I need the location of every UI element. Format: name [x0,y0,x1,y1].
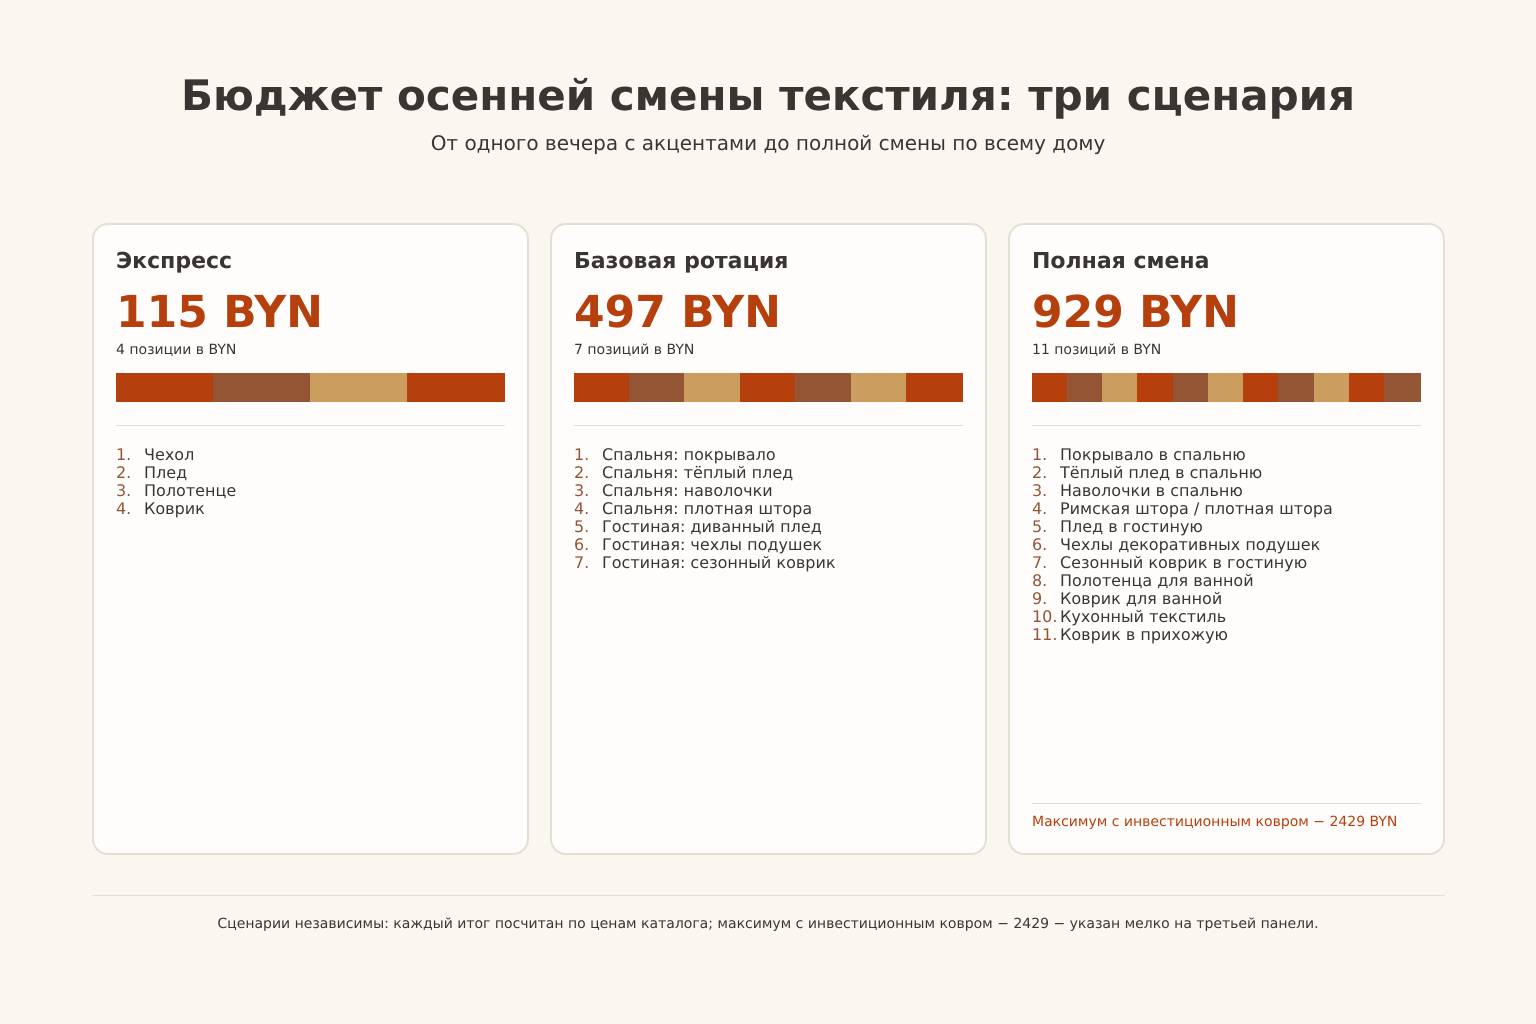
item list: 7. [574,553,589,572]
segmented bar [1032,373,1421,402]
item list: Коврик в прихожую [1060,625,1228,644]
item list [1032,445,1333,644]
item list: Кухонный текстиль [1060,607,1226,626]
panel heading: Экспресс [116,249,232,274]
item list: 10. [1032,607,1057,626]
item list: Полотенца для ванной [1060,571,1254,590]
panel: Экспресс [92,223,529,855]
title: Бюджет осенней смены текстиля: три сценария [181,71,1355,120]
item list: Покрывало в спальню [1060,445,1246,464]
item list: 1. [574,445,589,464]
item list: 6. [1032,535,1047,554]
item list: 8. [1032,571,1047,590]
item list: Коврик [144,499,205,518]
item list: 11. [1032,625,1057,644]
item count: 11 позиций в BYN [1032,342,1161,358]
item list: 3. [116,481,131,500]
item list: 2. [116,463,131,482]
item count: 4 позиции в BYN [116,342,236,358]
item list: 2. [1032,463,1047,482]
item list: Полотенце [144,481,236,500]
item list: Чехлы декоративных подушек [1060,535,1320,554]
item list: 6. [574,535,589,554]
item list: 1. [1032,445,1047,464]
item list: Плед в гостиную [1060,517,1203,536]
item list: Коврик для ванной [1060,589,1222,608]
item list: 5. [574,517,589,536]
item list: 4. [1032,499,1047,518]
item list: Спальня: наволочки [602,481,773,500]
item list: Гостиная: сезонный коврик [602,553,836,572]
item count: 7 позиций в BYN [574,342,694,358]
price: 115 BYN [116,287,323,338]
subtitle: От одного вечера с акцентами до полной смены по всему дому [431,131,1105,155]
item list: 9. [1032,589,1047,608]
item list: Плед [144,463,187,482]
item list: Сезонный коврик в гостиную [1060,553,1307,572]
item list: Чехол [144,445,194,464]
segmented bar [574,373,963,402]
item list: 7. [1032,553,1047,572]
panel: Полная смена [1008,223,1445,855]
item list: Спальня: плотная штора [602,499,812,518]
panel: Базовая ротация [550,223,987,855]
item list: Гостиная: диванный плед [602,517,822,536]
item list: Гостиная: чехлы подушек [602,535,822,554]
panel heading: Полная смена [1032,249,1209,274]
item list: Тёплый плед в спальню [1060,463,1262,482]
item list: 1. [116,445,131,464]
item list: Спальня: покрывало [602,445,776,464]
footer note: Сценарии независимы: каждый итог посчитан по ценам каталога; максимум с инвестиционным ковром − 2429 − указан мелко на третьей панели. [217,916,1319,932]
item list: 4. [116,499,131,518]
item list [574,445,836,572]
item list: Наволочки в спальню [1060,481,1243,500]
item list [116,445,236,518]
item list: Римская штора / плотная штора [1060,499,1333,518]
item list: 5. [1032,517,1047,536]
item list: 3. [574,481,589,500]
item list: Спальня: тёплый плед [602,463,793,482]
item list: 3. [1032,481,1047,500]
segmented bar [116,373,505,402]
maximum note: Максимум с инвестиционным ковром − 2429 BYN [1032,814,1397,830]
price: 497 BYN [574,287,781,338]
panel heading: Базовая ротация [574,249,788,274]
item list: 4. [574,499,589,518]
price: 929 BYN [1032,287,1239,338]
item list: 2. [574,463,589,482]
